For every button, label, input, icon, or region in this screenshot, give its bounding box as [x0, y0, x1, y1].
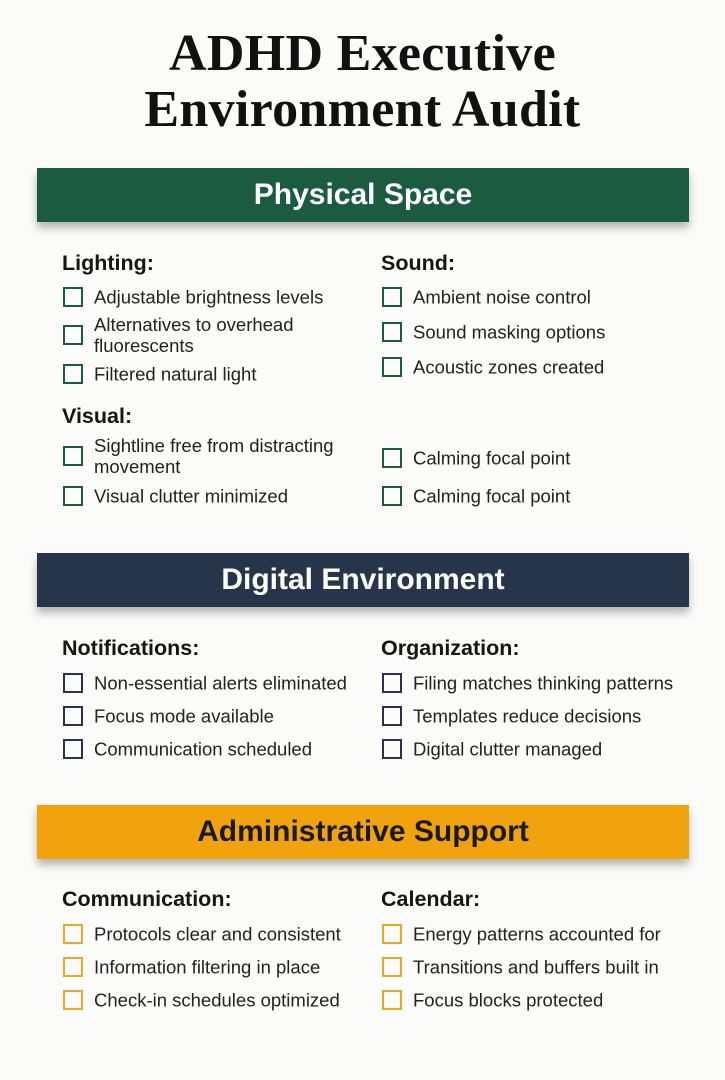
heading: Communication: Communication: — [62, 887, 232, 911]
item: digital clutter — [382, 738, 602, 760]
banner: Physical Space — [37, 168, 689, 222]
item: acoustic — [382, 356, 604, 378]
item: protocols — [63, 924, 341, 944]
heading: Calendar: Calendar: — [381, 887, 480, 911]
item: ambient — [382, 286, 591, 308]
item: focal 2 — [382, 486, 570, 506]
item: brightness — [63, 286, 323, 308]
banner: Administrative Support — [37, 805, 689, 859]
item: transitions — [382, 956, 659, 978]
item: natural light — [63, 364, 256, 384]
banner: Digital Environment — [37, 553, 689, 607]
item: masking — [382, 322, 605, 342]
text: Adjustable brightness levels — [94, 286, 323, 308]
text: Visual clutter minimized — [94, 486, 288, 506]
item: filtering — [63, 956, 320, 978]
banner: Digital Environment: Digital Environment — [221, 563, 505, 596]
item: energy — [382, 924, 661, 944]
text: Digital clutter managed — [413, 738, 602, 760]
text: Protocols clear and consistent — [94, 924, 341, 944]
banner: Administrative Support: Administrative Support — [197, 815, 529, 848]
text: Focus mode available — [94, 706, 274, 726]
text: Calming focal point — [413, 486, 570, 506]
text: Acoustic zones created — [413, 356, 604, 378]
text: Calming focal point — [413, 448, 570, 468]
text: Sightline free from distracting — [94, 435, 334, 456]
heading: Visual: Visual: — [62, 404, 132, 428]
item: templates — [382, 706, 641, 726]
item: focus mode — [63, 706, 274, 726]
text: Ambient noise control — [413, 286, 591, 308]
title: ADHD Executive — [169, 25, 556, 82]
text: movement — [94, 456, 180, 477]
text: Templates reduce decisions — [413, 706, 641, 726]
text: Transitions and buffers built in — [413, 956, 659, 978]
heading: Sound: Sound: — [381, 251, 455, 275]
text: Sound masking options — [413, 322, 605, 342]
text: Non-essential alerts eliminated — [94, 672, 347, 694]
heading: Notifications: Notifications: — [62, 636, 199, 660]
text: Communication scheduled — [94, 738, 312, 760]
item: alternatives — [63, 314, 294, 356]
heading: Lighting: Lighting: — [62, 251, 154, 275]
text: Filtered natural light — [94, 364, 256, 384]
item: focal 1 — [382, 448, 570, 468]
title — [144, 25, 581, 138]
item: clutter — [63, 486, 288, 506]
banner: Physical Space: Physical Space — [254, 178, 472, 211]
text: Check-in schedules optimized — [94, 990, 340, 1010]
text: Focus blocks protected — [413, 990, 603, 1010]
title: Environment Audit — [144, 81, 581, 138]
item: alerts — [63, 672, 347, 694]
heading: Organization: Organization: — [381, 636, 520, 660]
text: Energy patterns accounted for — [413, 924, 661, 944]
text: fluorescents — [94, 335, 194, 356]
item: sightline — [63, 435, 334, 477]
item: focus blocks — [382, 990, 603, 1010]
item: check-in — [63, 990, 340, 1010]
text: Alternatives to overhead — [94, 314, 294, 335]
text: Filing matches thinking patterns — [413, 672, 673, 694]
text: Information filtering in place — [94, 956, 320, 978]
item: communication — [63, 738, 312, 760]
item: filing — [382, 672, 673, 694]
